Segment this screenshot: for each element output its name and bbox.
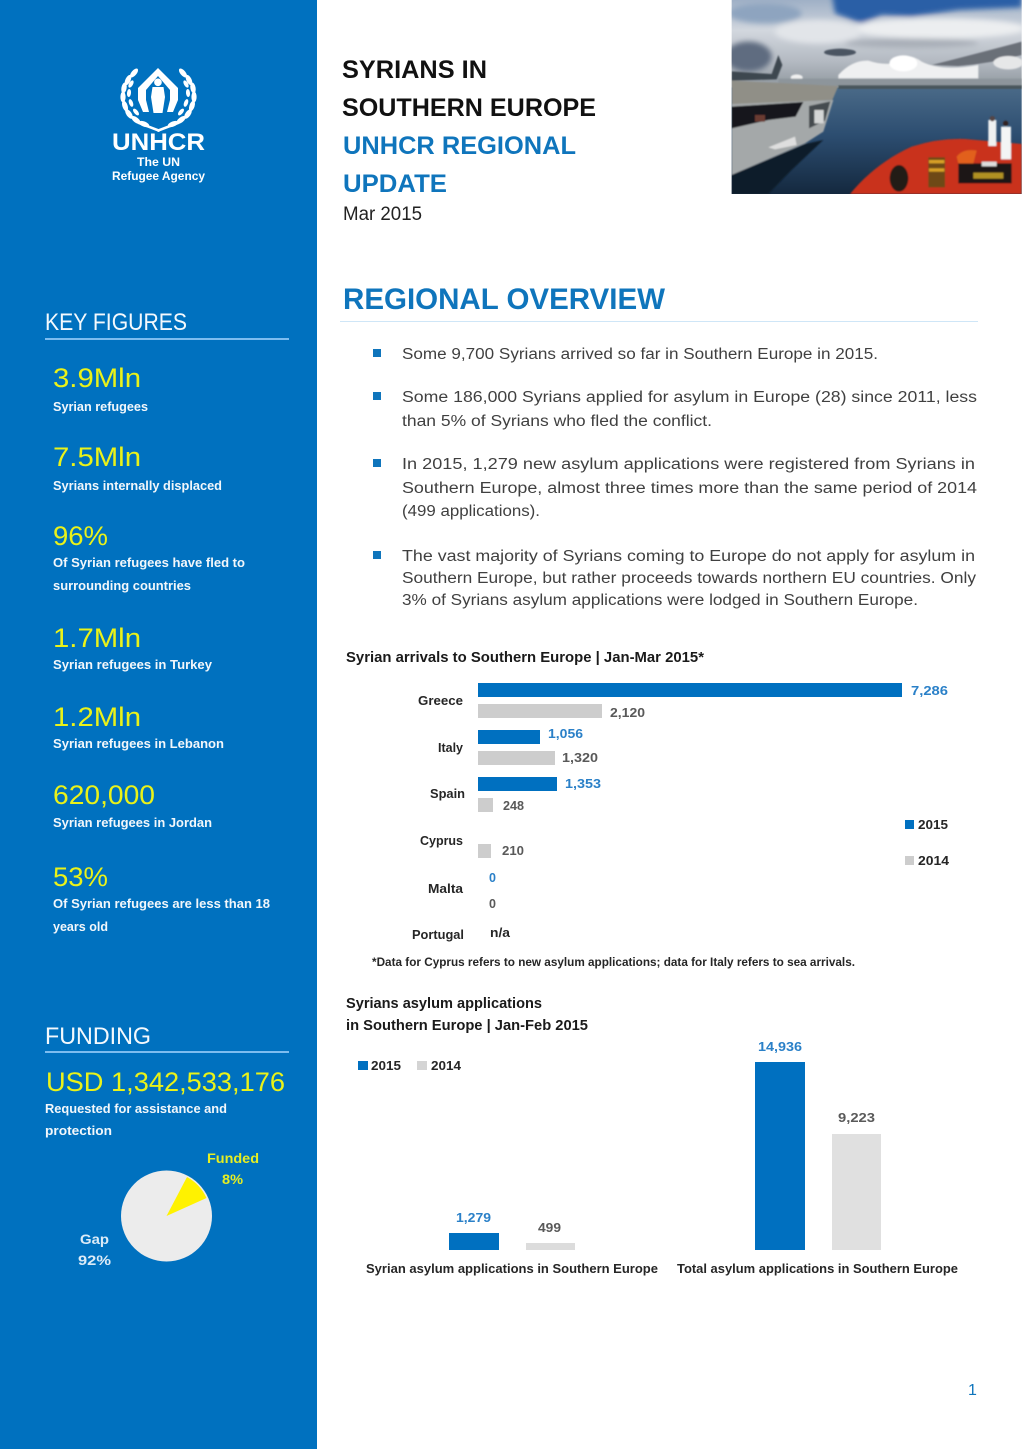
pie label: funded: 8% <box>222 1172 243 1187</box>
key figure: Turkey <box>53 623 212 672</box>
category labels: Total asylum applications in Southern Europe <box>677 1262 958 1276</box>
pie label: gap: 92% <box>78 1253 111 1268</box>
bar chart: asylum applications <box>346 996 958 1276</box>
country labels: Italy <box>438 741 463 755</box>
value labels: 1,279 <box>456 1211 491 1225</box>
key figure: internally displaced: 7.5Mln <box>53 442 141 472</box>
country labels: Greece <box>418 694 463 708</box>
bullet 2 <box>373 389 977 430</box>
value labels: 210 <box>502 844 524 858</box>
date: Mar 2015 <box>343 204 422 225</box>
country labels <box>412 694 465 942</box>
funding amount: USD 1,342,533,176 <box>46 1067 285 1097</box>
title: SOUTHERN EUROPE <box>342 94 596 122</box>
title: SYRIANS IN <box>342 56 487 84</box>
legend: 2014 <box>918 854 949 868</box>
pie label: funded <box>207 1151 259 1187</box>
country labels: Spain <box>430 787 465 801</box>
panel: sidebar <box>0 0 317 1449</box>
key figure: under 18: 53% <box>53 862 108 892</box>
funding amount: protection <box>45 1124 112 1138</box>
bullet 3: (499 applications). <box>402 503 540 520</box>
value labels <box>489 684 948 940</box>
key figure: Turkey: Syrian refugees in Turkey <box>53 658 212 672</box>
legend <box>905 818 949 868</box>
key figure: surrounding countries: 96% <box>53 521 108 551</box>
key figure: surrounding countries: Of Syrian refugees have fled to <box>53 556 245 570</box>
pie label: funded: Funded <box>207 1151 259 1166</box>
pie slice: funded <box>166 1177 206 1216</box>
legend: 2015 <box>371 1059 401 1073</box>
value labels: 499 <box>538 1221 561 1235</box>
funding amount: Requested for assistance and <box>45 1102 227 1116</box>
text block: overview bullets <box>373 346 977 609</box>
value labels: 1,353 <box>565 777 601 791</box>
icon: laurel right <box>156 67 197 132</box>
bullet 4: Southern Europe, but rather proceeds towards northern EU countries. Only <box>402 570 976 587</box>
key figure: Lebanon: Syrian refugees in Lebanon <box>53 737 224 751</box>
value labels: 2,120 <box>610 706 645 720</box>
logo tagline line 1: The UN <box>137 155 180 169</box>
legend: 2014 <box>431 1059 461 1073</box>
bullet 3 <box>373 456 977 520</box>
bullet 3: In 2015, 1,279 new asylum applications were registered from Syrians in <box>402 456 975 473</box>
heading: funding: FUNDING <box>45 1023 151 1050</box>
bars: 2014 <box>478 704 602 858</box>
pie label: gap <box>78 1232 111 1268</box>
value labels: 1,320 <box>562 751 598 765</box>
icon: sheltering hands <box>138 68 178 112</box>
title: UPDATE <box>343 170 447 198</box>
category labels: Syrian asylum applications in Southern Europe <box>366 1262 658 1276</box>
logo tagline line 2: Refugee Agency <box>112 169 205 183</box>
key figure: surrounding countries: surrounding countries <box>53 579 191 593</box>
key figure: Jordan: Syrian refugees in Jordan <box>53 816 212 830</box>
title <box>342 56 596 198</box>
logo wordmark: UNHCR <box>112 129 205 156</box>
icon: UNHCR logo <box>112 67 205 183</box>
bullet 3: Southern Europe, almost three times more than the same period of 2014 <box>402 480 977 497</box>
chart title <box>346 996 588 1034</box>
value labels <box>456 1040 875 1235</box>
icon: figure <box>151 78 165 113</box>
value labels: 248 <box>503 799 524 813</box>
chart title: in Southern Europe | Jan-Feb 2015 <box>346 1018 588 1034</box>
icon: laurel left <box>120 67 161 132</box>
chart title: Syrian arrivals to Southern Europe | Jan-Mar 2015* <box>346 650 704 666</box>
chart title: Syrians asylum applications <box>346 996 542 1012</box>
key figure: Turkey: 1.7Mln <box>53 623 141 653</box>
value labels: 0 <box>489 897 496 911</box>
key figure: internally displaced <box>53 442 222 493</box>
bullet 2: Some 186,000 Syrians applied for asylum in Europe (28) since 2011, less <box>402 389 977 406</box>
bars: 2015 <box>478 683 902 791</box>
country labels: Portugal <box>412 928 464 942</box>
photo: rescue ship at sea <box>732 0 1022 194</box>
pie label: gap: Gap <box>80 1232 109 1247</box>
value labels: 1,056 <box>548 727 583 741</box>
bullet 4 <box>373 548 976 609</box>
legend: 2015 <box>918 818 948 832</box>
category labels <box>366 1262 958 1276</box>
legend <box>358 1059 461 1073</box>
bullet 4: 3% of Syrians asylum applications were lodged in Southern Europe. <box>402 592 918 609</box>
page number: 1 <box>968 1382 977 1399</box>
heading: key figures: KEY FIGURES <box>45 309 187 336</box>
value labels: n/a <box>490 926 511 940</box>
key figure: under 18 <box>53 862 270 934</box>
value labels: 0 <box>489 871 496 885</box>
key figure: Lebanon: 1.2Mln <box>53 702 141 732</box>
key figure: surrounding countries <box>53 521 245 593</box>
bars <box>449 1062 881 1250</box>
key figure: Lebanon <box>53 702 224 751</box>
footnote: *Data for Cyprus refers to new asylum applications; data for Italy refers to sea arrivals. <box>372 957 855 969</box>
bullet 2: than 5% of Syrians who fled the conflict. <box>402 413 712 430</box>
value labels: 14,936 <box>758 1040 802 1054</box>
country labels: Cyprus <box>420 834 463 848</box>
country labels: Malta <box>428 882 464 896</box>
key figure: Syrian refugees: Syrian refugees <box>53 400 148 414</box>
key figure: Jordan <box>53 780 212 830</box>
key figure: under 18: years old <box>53 920 108 934</box>
value labels: 9,223 <box>838 1111 875 1125</box>
key figure: Syrian refugees <box>53 363 148 414</box>
funding amount <box>45 1067 285 1138</box>
key figure: Jordan: 620,000 <box>53 780 155 810</box>
key figure: Syrian refugees: 3.9Mln <box>53 363 141 393</box>
pie chart: funding <box>78 1151 259 1268</box>
key figure: internally displaced: Syrians internally displaced <box>53 479 222 493</box>
bullet 4: The vast majority of Syrians coming to Europe do not apply for asylum in <box>402 548 975 565</box>
bar chart: arrivals <box>346 650 949 969</box>
bullet 1: Some 9,700 Syrians arrived so far in Southern Europe in 2015. <box>402 346 878 363</box>
key figure: under 18: Of Syrian refugees are less than 18 <box>53 897 270 911</box>
title: UNHCR REGIONAL <box>343 132 576 160</box>
heading: regional overview: REGIONAL OVERVIEW <box>343 283 666 316</box>
value labels: 7,286 <box>911 684 948 698</box>
